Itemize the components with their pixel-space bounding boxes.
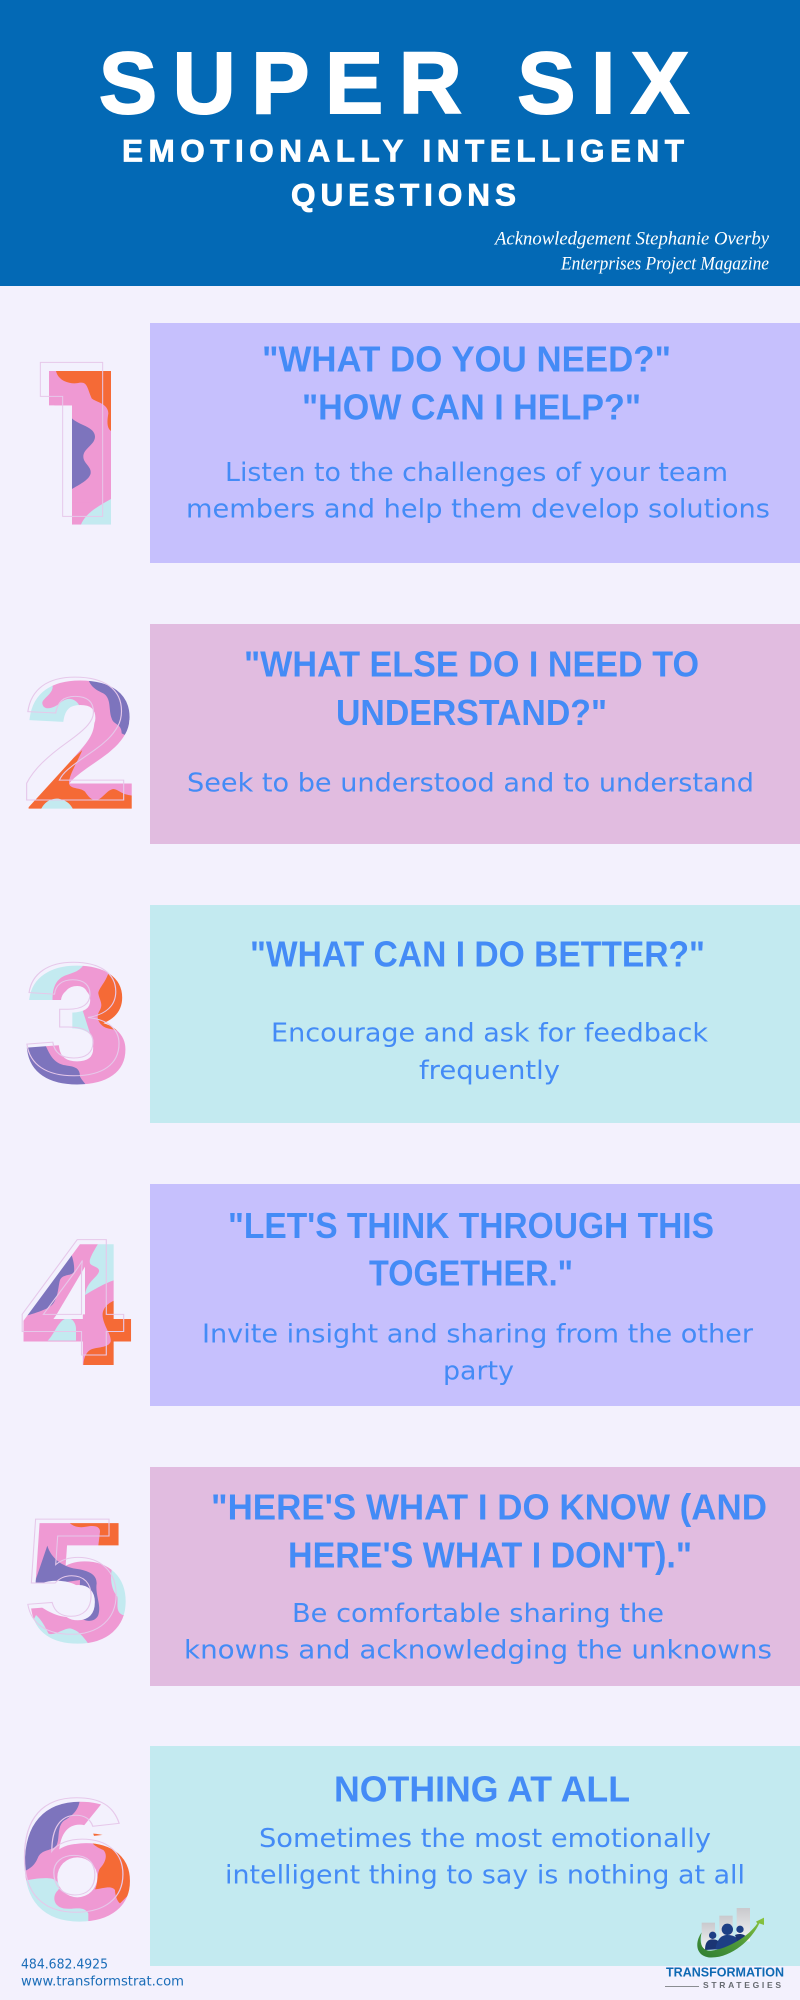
panel 2 [150,624,800,844]
number 1: 1 [40,333,159,571]
panel 4 [150,1184,800,1406]
number 1 [40,362,111,524]
panel 4 heading: "LET'S THINK THROUGH THIS [228,1205,714,1246]
panel 6 body [225,1824,745,1891]
panel 5 body: Be comfortable sharing the [292,1599,664,1629]
acknowledgement: Acknowledgement Stephanie Overby [493,228,770,249]
logo icon: bars, people and arrow swoosh [697,1908,764,1957]
number 2: 2 [20,642,132,838]
panel 1 [150,323,800,563]
contact details: www.transformstrat.com [21,1973,184,1989]
number 6 [24,1797,130,1922]
panel 3 [150,905,800,1123]
number 4: 4 [19,1203,125,1391]
panel 4 body: party [443,1357,514,1387]
panel 6 heading: NOTHING AT ALL [334,1769,630,1810]
panel 1 body [186,458,770,525]
panel 2 body: Seek to be understood and to understand [187,769,754,799]
header banner [0,0,800,286]
title: SUPER SIX [99,35,689,132]
panel 5 body: knowns and acknowledging the unknowns [184,1636,772,1666]
panel 5 heading: "HERE'S WHAT I DO KNOW (AND [211,1487,767,1528]
acknowledgement [493,228,770,274]
panel 1 body: Listen to the challenges of your team [225,458,728,488]
contact details [21,1957,184,1989]
number 5 [27,1518,126,1644]
number 3 [26,962,126,1084]
panel 3 body [271,1019,708,1086]
panel 2 heading: "WHAT ELSE DO I NEED TO [244,644,699,685]
panel 3 body: Encourage and ask for feedback [271,1019,708,1049]
number 3: 3 [23,929,126,1108]
panel 2 heading [244,644,699,733]
subtitle: QUESTIONS [291,177,516,213]
panel 1 heading: "WHAT DO YOU NEED?" [262,339,671,380]
subtitle [122,133,684,213]
panel 4 heading: TOGETHER." [369,1253,573,1294]
panel 1 heading [262,339,671,427]
panel 4 body: Invite insight and sharing from the other [202,1319,753,1349]
subtitle: EMOTIONALLY INTELLIGENT [122,133,684,169]
number 6: 6 [17,1765,130,1945]
panel 5 [150,1467,800,1686]
panel 6 [150,1746,800,1966]
panel 5 heading: HERE'S WHAT I DON'T)." [288,1535,692,1576]
panel 3 body: frequently [419,1056,560,1086]
logo wordmark [666,1965,784,1990]
contact details: 484.682.4925 [21,1957,108,1973]
number 4 [22,1239,132,1365]
panel 6 body: Sometimes the most emotionally [259,1824,711,1854]
logo wordmark: STRATEGIES [703,1980,781,1990]
panel 4 heading [228,1205,714,1294]
number 5: 5 [22,1484,121,1668]
panel 1 body: members and help them develop solutions [186,495,770,525]
number 2 [26,676,132,809]
panel 5 body [184,1599,772,1666]
panel 4 body [202,1319,753,1387]
panel 3 heading: "WHAT CAN I DO BETTER?" [250,934,705,975]
panel 5 heading [211,1487,767,1576]
panel 6 body: intelligent thing to say is nothing at all [225,1861,745,1891]
acknowledgement: Enterprises Project Magazine [560,253,769,274]
panel 1 heading: "HOW CAN I HELP?" [302,386,641,427]
panel 2 heading: UNDERSTAND?" [336,692,607,733]
logo: Transformation Strategies [665,1908,784,1990]
logo wordmark: TRANSFORMATION [666,1965,784,1980]
